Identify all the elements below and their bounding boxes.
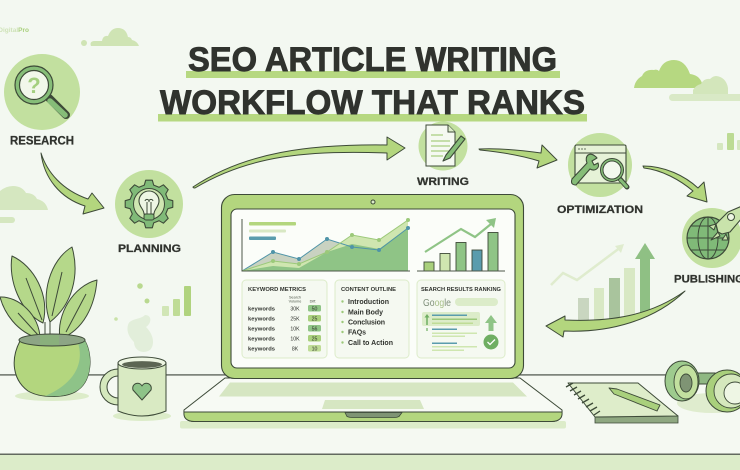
panel: keyword metrics: 25K <box>290 316 300 322</box>
panel: keyword metrics: keywords <box>248 336 275 342</box>
panel: keyword metrics: 10K <box>290 326 300 332</box>
label: writing: WRITING <box>417 176 469 188</box>
panel: keyword metrics: 10 <box>312 346 317 352</box>
panel: search results ranking <box>417 280 505 358</box>
panel: keyword metrics: KEYWORD METRICS <box>248 287 306 293</box>
cloud: left <box>0 186 48 223</box>
panel: keyword metrics: 10K <box>290 336 300 342</box>
label: publishing: PUBLISHING <box>674 274 740 286</box>
icon: rocket <box>709 206 740 240</box>
pot <box>14 334 90 397</box>
step: planning <box>115 170 183 255</box>
panel: search results ranking: SEARCH RESULTS RANKING <box>421 287 501 293</box>
headphones <box>665 361 740 413</box>
panel: keyword metrics: keywords <box>248 316 275 322</box>
icon: gear with light bulb <box>125 180 173 228</box>
title: SEO ARTICLE WRITING <box>188 41 557 79</box>
laptop lid <box>222 194 524 378</box>
plant <box>0 247 97 401</box>
panel: content outline: Conclusion <box>348 320 385 326</box>
icon: document and pen <box>426 125 465 166</box>
mini bars: top right <box>717 133 740 150</box>
panel: content outline: Call to Action <box>348 340 393 347</box>
title: WORKFLOW THAT RANKS <box>160 84 585 122</box>
bar chart with trend arrow <box>417 218 505 271</box>
title <box>158 41 587 122</box>
laptop screen <box>231 209 515 368</box>
icon: globe <box>687 217 729 259</box>
leaves <box>0 247 97 345</box>
step: optimization <box>557 133 643 216</box>
panel: content outline: CONTENT OUTLINE <box>341 287 396 293</box>
icon: magnifying glass: ? <box>27 73 41 98</box>
panel: keyword metrics <box>242 280 327 358</box>
icon: heart <box>133 383 151 400</box>
panel: keyword metrics: Volume <box>289 300 301 304</box>
icon: pencil <box>609 388 660 411</box>
panel: keyword metrics: keywords <box>248 306 275 312</box>
panel: keyword metrics: keywords <box>248 346 275 352</box>
panel: keyword metrics: 25 <box>312 316 317 322</box>
label: planning: PLANNING <box>118 243 181 255</box>
step: publishing <box>674 206 740 286</box>
cloud: top left <box>81 28 139 46</box>
panel: keyword metrics: 8K <box>292 346 299 352</box>
coffee mug <box>104 357 171 421</box>
arrow: writing to optimization <box>479 145 557 168</box>
arrow: optimization to publishing <box>643 166 707 202</box>
icon: check badge <box>484 334 498 350</box>
label: optimization: OPTIMIZATION <box>557 204 643 216</box>
panel: content outline: Main Body <box>348 310 383 316</box>
panel: keyword metrics: 50 <box>312 306 317 312</box>
step: research <box>4 54 80 148</box>
panel: keyword metrics: 25 <box>312 336 317 342</box>
label: research: RESEARCH <box>10 136 74 148</box>
steam and floating dots <box>114 283 153 352</box>
panel: keyword metrics: 30K <box>290 306 300 312</box>
step: writing <box>417 122 469 188</box>
panel: content outline <box>335 280 409 358</box>
panel: content outline: Introduction <box>348 299 389 306</box>
laptop base <box>184 378 562 422</box>
icon: browser window, wrench and magnifier <box>572 145 627 187</box>
cloud: top right <box>634 60 740 101</box>
area chart <box>242 218 410 271</box>
panel: keyword metrics: Search <box>289 296 301 300</box>
panel: keyword metrics: keywords <box>248 326 275 332</box>
arrow: publishing to laptop <box>546 291 685 337</box>
panel: keyword metrics: 56 <box>312 326 317 332</box>
icon: up arrow <box>485 315 497 331</box>
panel: content outline: FAQs <box>348 330 366 336</box>
panel: keyword metrics: Diff. <box>310 300 316 304</box>
arrow: research to planning <box>41 153 104 214</box>
laptop <box>180 194 566 428</box>
mini bars: near planning <box>162 286 191 316</box>
arrow: planning to writing <box>193 137 405 188</box>
faint trend chart behind arrow <box>551 243 655 323</box>
notebook and pencil <box>566 383 678 423</box>
panel: search results ranking: Google <box>423 298 451 309</box>
